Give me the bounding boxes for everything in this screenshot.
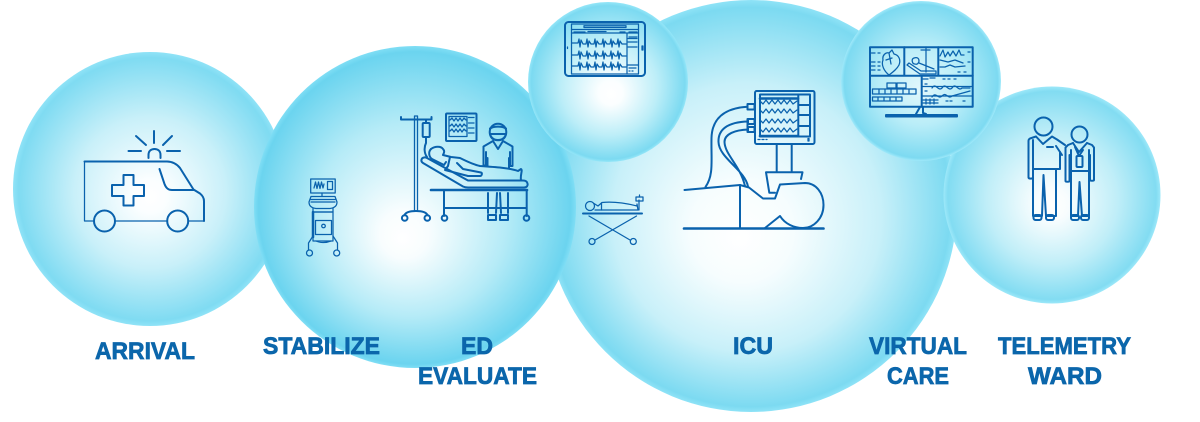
- panel: ED bubble: [254, 46, 576, 368]
- icon: ED evaluate scene: [401, 114, 529, 221]
- icon: nurse with badge: [1066, 126, 1094, 220]
- icon: vitals monitor: [446, 114, 476, 141]
- heading: stabilize: STABILIZE: [263, 333, 380, 360]
- panel: telemetry bubble: [944, 86, 1160, 304]
- icon: table blocks: [872, 83, 916, 101]
- icon: virtual care workstation: [870, 47, 973, 116]
- panel: tablet bubble: [528, 2, 688, 162]
- icon: telemetry staff pair: [1028, 118, 1094, 220]
- icon: ICU ventilator and patient: [684, 91, 824, 228]
- icon: stabilize ultrasound cart: [306, 179, 340, 256]
- icon: stretcher with patient: [583, 195, 643, 244]
- icon: patient in bed: [421, 147, 529, 221]
- icon: mini patient bed: [907, 47, 936, 74]
- heading: virtual care: VIRTUAL: [869, 333, 967, 360]
- panel: arrival bubble: [13, 52, 287, 326]
- icon: tablet with waveforms: [565, 22, 645, 76]
- icon: heart: [882, 50, 900, 75]
- panel: ICU bubble: [545, 0, 957, 412]
- icon: clinician: [1028, 118, 1065, 220]
- heading: telemetry ward: WARD: [1028, 363, 1102, 390]
- heading: telemetry ward: [998, 333, 1131, 390]
- heading: telemetry ward: TELEMETRY: [998, 333, 1131, 360]
- icon: ventilator stand: [766, 145, 802, 193]
- heading: ED evaluate: ED: [461, 333, 493, 360]
- icon: workstation stand: [886, 107, 957, 116]
- heading: ED evaluate: EVALUATE: [418, 363, 537, 390]
- heading: virtual care: [869, 333, 967, 390]
- icon: IV pole: [401, 116, 432, 221]
- icon: ventilator monitor: [755, 91, 814, 144]
- icon: trend waves: [923, 78, 970, 104]
- icon: ventilator tubes: [748, 104, 754, 132]
- panel: virtual care bubble: [841, 1, 1001, 161]
- icon: ICU patient: [684, 183, 824, 228]
- icon: ambulance: [84, 131, 204, 232]
- heading: virtual care: CARE: [887, 363, 949, 390]
- icon: doctor: [484, 124, 512, 220]
- heading: ICU: ICU: [733, 333, 773, 360]
- heading: ED evaluate: [418, 333, 537, 390]
- heading: arrival: ARRIVAL: [95, 338, 195, 365]
